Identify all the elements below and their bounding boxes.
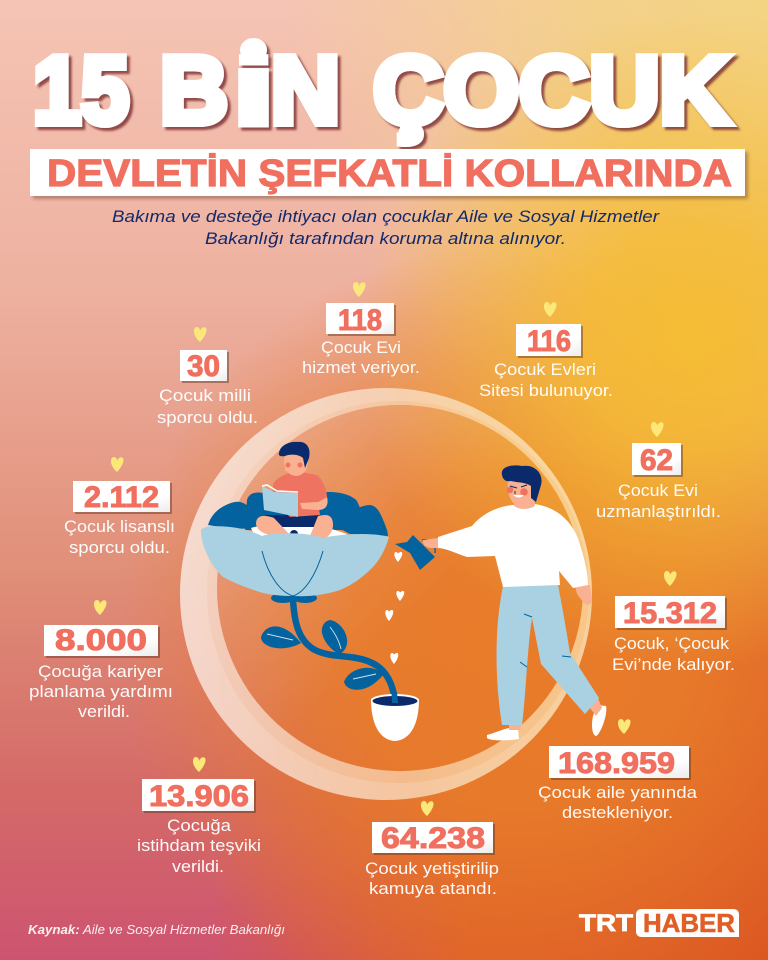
stat: 30: Çocuk milli	[159, 386, 251, 405]
stat: 30	[157, 327, 258, 427]
stat: 8.000	[29, 600, 173, 721]
stat: 13.906	[137, 757, 261, 876]
stat: 168.959: 168.959	[558, 747, 675, 780]
stat: 30: sporcu oldu.	[157, 408, 258, 427]
stat: 62: 62	[640, 444, 673, 477]
stat: 168.959	[538, 719, 698, 822]
stat: 15.312: Çocuk, ‘Çocuk	[614, 634, 730, 653]
stat: 30: 30	[187, 350, 220, 383]
neck and head	[514, 497, 535, 509]
intro text: Bakıma ve desteğe ihtiyacı olan çocuklar Aile ve Sosyal Hizmetler	[112, 207, 660, 226]
stat: 64.238: kamuya atandı.	[369, 879, 497, 898]
flower pot	[371, 692, 419, 741]
plant stem and leaves	[261, 593, 395, 703]
legs	[509, 722, 522, 730]
flower back petals	[208, 492, 388, 536]
right hand	[575, 585, 592, 605]
watering can	[395, 535, 435, 570]
shoes	[487, 728, 519, 740]
stat: 2.112: Çocuk lisanslı	[64, 517, 175, 536]
intro text	[112, 207, 660, 248]
hand on can	[423, 538, 439, 548]
stat: 116: 116	[527, 325, 571, 358]
falling hearts	[385, 552, 404, 664]
stat: 64.238	[365, 801, 499, 898]
logo: TRT Haber	[579, 908, 739, 938]
source: Kaynak: Aile ve Sosyal Hizmetler Bakanlığı	[28, 923, 285, 937]
stat: 118: Çocuk Evi	[321, 338, 401, 357]
stat: 8.000: 8.000	[55, 624, 147, 657]
stat: 15.312: Evi’nde kalıyor.	[612, 655, 735, 674]
reading child	[256, 442, 333, 542]
flower front petals	[201, 526, 389, 596]
stat: 116	[479, 302, 613, 400]
sweater	[438, 504, 588, 588]
stat: 15.312	[612, 571, 735, 674]
stat: 2.112	[64, 457, 175, 557]
hair	[502, 465, 542, 502]
ring	[180, 388, 592, 800]
inner white of flower	[251, 523, 347, 552]
stat: 13.906: istihdam teşviki	[137, 836, 261, 855]
stat: 13.906: Çocuğa	[167, 816, 232, 835]
stat: 116: Sitesi bulunuyor.	[479, 381, 613, 400]
stat: 64.238: 64.238	[381, 822, 485, 855]
stat: 168.959: destekleniyor.	[562, 803, 673, 822]
stat: 8.000: Çocuğa kariyer	[38, 662, 163, 681]
stat: 62: Çocuk Evi	[618, 481, 698, 500]
title: B	[160, 37, 228, 144]
stat: 13.906: verildi.	[172, 857, 224, 876]
title: N	[271, 37, 340, 144]
stat: 13.906: 13.906	[149, 780, 249, 813]
stat: 64.238: Çocuk yetiştirilip	[365, 859, 499, 878]
stat: 15.312: 15.312	[623, 597, 717, 630]
stat: 8.000: verildi.	[78, 702, 130, 721]
stat: 168.959: Çocuk aile yanında	[538, 783, 698, 802]
stat: 2.112: sporcu oldu.	[69, 538, 170, 557]
illustration: flower with reading child	[201, 442, 419, 741]
intro text: Bakanlığı tarafından koruma altına alınıyor.	[205, 229, 566, 248]
title: 15	[33, 37, 129, 144]
stat: 116: Çocuk Evleri	[494, 360, 596, 379]
subtitle banner: DEVLETİN ŞEFKATLİ KOLLARINDA	[47, 153, 732, 195]
title: ÇOCUK	[373, 37, 730, 144]
stat: 118: 118	[338, 304, 382, 337]
title: İ	[230, 53, 277, 144]
stat: 8.000: planlama yardımı	[29, 682, 173, 701]
logo: TRT Haber: HABER	[643, 908, 735, 938]
title	[33, 37, 730, 144]
logo: TRT Haber: TRT	[579, 910, 633, 937]
stat: 62	[596, 422, 721, 521]
illustration: man with watering can	[395, 465, 606, 740]
stat: 2.112: 2.112	[84, 481, 159, 514]
stat: 118: hizmet veriyor.	[302, 358, 420, 377]
stat: 62: uzmanlaştırıldı.	[596, 502, 721, 521]
stat: 118	[302, 282, 420, 377]
